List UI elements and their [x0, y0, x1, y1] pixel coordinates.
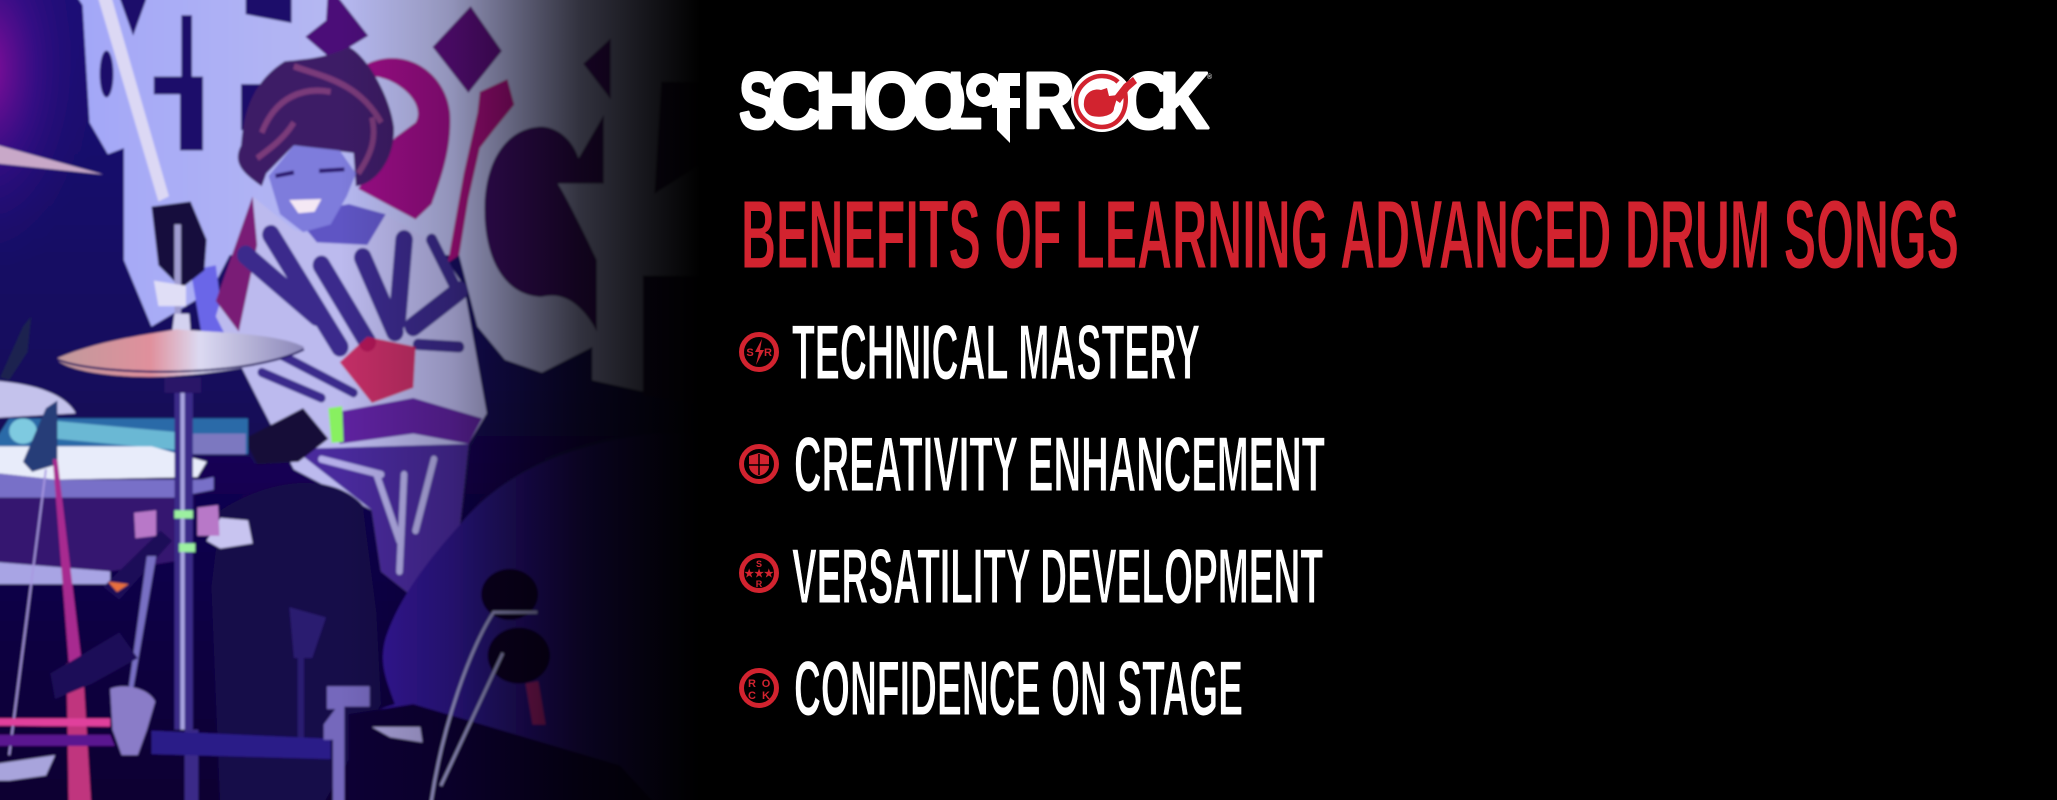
logo word R: R — [1023, 56, 1075, 145]
banner: wall lettering — [69, 0, 720, 408]
logo word SCHOOL: C — [768, 56, 822, 145]
banner letter shapes — [100, 0, 292, 151]
icon: three stars badge: S — [756, 559, 762, 569]
text: CREATIVITY ENHANCEMENT — [794, 420, 1325, 508]
hi-hat cymbal stand — [154, 224, 201, 800]
drum hardware clamps — [51, 505, 219, 699]
logo word SCHOOL: H — [815, 56, 869, 145]
drummer arm raised with stick — [94, 0, 225, 337]
hi-hat cymbal — [56, 329, 304, 377]
item: versatility development — [742, 532, 1323, 620]
left crash cymbal — [0, 142, 103, 174]
banner letter C and K — [484, 115, 720, 408]
icon: lightning S R badge — [742, 334, 776, 370]
stage backdrop — [0, 0, 720, 800]
photo: drummer on stage — [0, 0, 740, 800]
text: VERSATILITY DEVELOPMENT — [792, 532, 1323, 620]
icon: rock badge: C — [748, 690, 756, 702]
icon: rock badge: R — [748, 678, 756, 690]
logo word SCHOOL: O — [911, 56, 966, 145]
drummer neck and collar — [294, 204, 386, 245]
logo guitar ring — [1071, 70, 1137, 132]
icon: lightning S R badge: R — [764, 347, 772, 359]
logo word SCHOOL — [739, 56, 982, 145]
text: CONFIDENCE ON STAGE — [794, 644, 1243, 732]
logo word SCHOOL: L — [948, 56, 982, 145]
drummer shirt tie-dye — [216, 196, 487, 597]
icon: crest badge — [742, 446, 776, 482]
icon: rock badge: O — [762, 678, 771, 690]
magenta light glow — [0, 0, 138, 265]
logo small o — [971, 78, 995, 102]
registered mark: ® — [1207, 73, 1213, 81]
drummer smile — [289, 199, 321, 213]
logo f — [992, 73, 1020, 143]
banner purple emblem — [305, 0, 720, 194]
drummer eyes — [276, 169, 344, 176]
logo word SCHOOL: O — [864, 56, 920, 145]
item: creativity enhancement — [742, 420, 1325, 508]
icon: rock badge: K — [762, 690, 770, 702]
logo: School of Rock — [739, 56, 1213, 145]
text: TECHNICAL MASTERY — [792, 308, 1200, 396]
icon: three stars badge: R — [756, 579, 763, 589]
drummer legs — [211, 483, 381, 800]
logo word CK — [1122, 56, 1209, 145]
stage monitor speaker — [349, 434, 720, 800]
drummer face — [269, 145, 356, 232]
icon: rock badge — [742, 670, 776, 706]
logo word SCHOOL: S — [739, 56, 777, 145]
ripped knee — [207, 518, 253, 548]
drum stool — [289, 607, 326, 740]
drummer hair — [238, 47, 394, 186]
item: technical mastery — [742, 308, 1200, 396]
drummer forearm and wristband — [244, 398, 482, 464]
logo word CK: C — [1122, 56, 1172, 145]
overhead microphone and stand — [0, 316, 92, 800]
item: confidence on stage — [742, 644, 1243, 732]
snare and tom drums — [0, 380, 248, 584]
icon: lightning S R badge: S — [746, 347, 754, 359]
kit rails and tom mount — [0, 686, 370, 800]
icon: three stars badge — [742, 556, 776, 590]
icon: three stars badge: ★★★ — [744, 568, 774, 580]
banner guitar emblem — [358, 58, 514, 263]
logo word CK: K — [1160, 56, 1209, 145]
right edge fade to black — [340, 0, 740, 800]
